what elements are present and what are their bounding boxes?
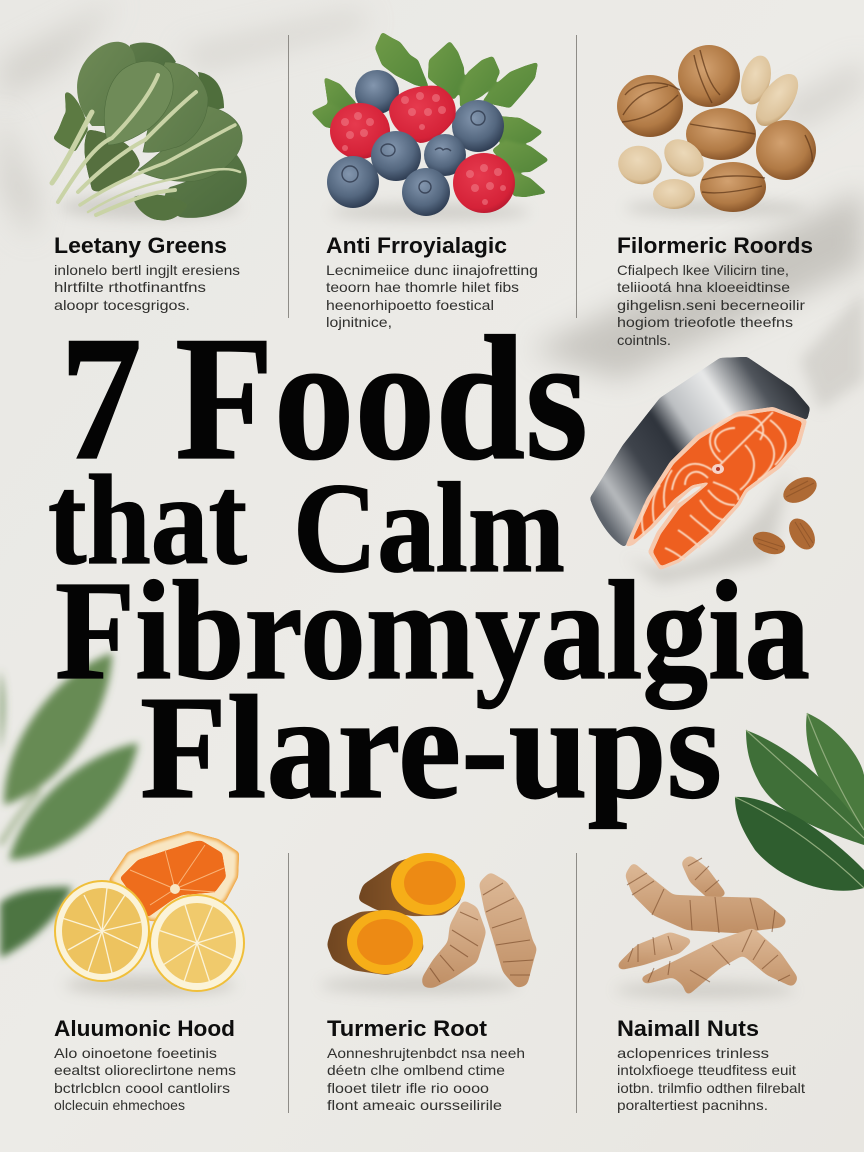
- panel: citrus text: olclecuin ehmechoes: [54, 1097, 185, 1113]
- panel: leafy greens text: hlrtfilte rthotfinantfns: [54, 279, 206, 295]
- panel: root foods text: gihgelisn.seni becerneoilir: [617, 297, 805, 313]
- panel: citrus text: [54, 1016, 236, 1113]
- panel: leafy greens text: inlonelo bertl ingjlt eresiens: [54, 262, 240, 278]
- panel: anti-inflammatory text: teoorn hae thomrle hilet fibs: [326, 279, 519, 295]
- panel: anti-inflammatory text: Lecnimeiice dunc iinajofretting: [326, 262, 538, 278]
- panel: turmeric root text: déetn clhe omlbend ctime: [327, 1062, 505, 1078]
- panel: nuts text: [617, 1016, 805, 1113]
- title: Foods: [175, 299, 588, 497]
- panel: citrus text: eealtst olioreclirtone nems: [54, 1062, 236, 1078]
- panel: leafy greens text: [54, 233, 240, 313]
- title: [48, 299, 810, 830]
- panel: root foods text: cointnls.: [617, 332, 671, 348]
- panel: nuts text: iotbn. trilmfio odthen filrebalt: [617, 1080, 805, 1096]
- panel: nuts text: Naimall Nuts: [617, 1016, 759, 1041]
- title: Calm: [293, 456, 565, 599]
- panel: anti-inflammatory text: [326, 233, 538, 330]
- title: Flare-ups: [140, 666, 722, 830]
- panel: leafy greens text: Leetany Greens: [54, 233, 227, 258]
- food illustration: salmon fillet: [590, 357, 821, 585]
- title: that: [48, 449, 247, 591]
- food illustration: mixed nuts: [614, 45, 816, 216]
- panel: root foods text: Cfialpech lkee Vilicirn tine,: [617, 262, 789, 278]
- food illustration: citrus slices: [55, 832, 244, 995]
- food illustration: blurred leaves at left: [0, 653, 138, 958]
- panel: turmeric root text: flooet tiletr ifle rio oooo: [327, 1080, 489, 1096]
- panel: citrus text: Aluumonic Hood: [54, 1016, 235, 1041]
- panel: anti-inflammatory text: heenorhipoetto foestical: [326, 297, 494, 313]
- panel: turmeric root text: flont ameaic oursseilirile: [327, 1097, 502, 1113]
- title: 7: [60, 299, 142, 497]
- panel: turmeric root text: Turmeric Root: [327, 1016, 488, 1041]
- panel: turmeric root text: [327, 1016, 525, 1113]
- panel: anti-inflammatory text: lojnitnice,: [326, 314, 392, 330]
- panel: nuts text: aclopenrices trinless: [617, 1045, 769, 1061]
- panel: leafy greens text: aloopr tocesgrigos.: [54, 297, 190, 313]
- food illustration: cut turmeric: [320, 853, 537, 994]
- panel: citrus text: bctrlcblcn coool cantlolirs: [54, 1080, 230, 1096]
- food illustration: turmeric roots: [615, 855, 798, 998]
- food illustration: leafy greens: [52, 42, 247, 220]
- food illustration: green leaves at right: [735, 713, 864, 891]
- panel: nuts text: poraltertiest pacnihns.: [617, 1097, 768, 1113]
- panel: root foods text: [617, 233, 813, 348]
- panel: nuts text: intolxfioege tteudfitess euit: [617, 1062, 796, 1078]
- panel: turmeric root text: Aonneshrujtenbdct nsa neeh: [327, 1045, 525, 1061]
- panel: root foods text: teliiootá hna kloeeidtinse: [617, 279, 790, 295]
- food illustration: berries and leaves: [311, 32, 549, 220]
- title: Fibromyalgia: [55, 551, 810, 709]
- panel: root foods text: Filormeric Roords: [617, 233, 813, 258]
- panel: root foods text: hogiom trieofotle theefns: [617, 314, 793, 330]
- panel: citrus text: Alo oinoetone foeetinis: [54, 1045, 217, 1061]
- panel: anti-inflammatory text: Anti Frroyialagic: [326, 233, 507, 258]
